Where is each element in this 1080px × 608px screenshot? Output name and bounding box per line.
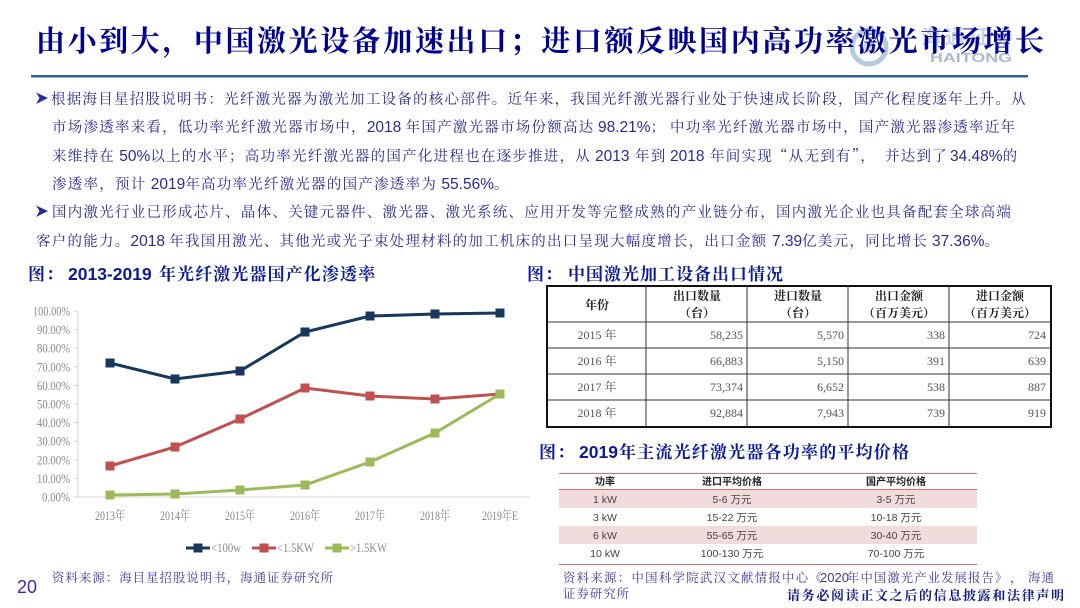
table rows: 92,884 bbox=[710, 406, 743, 420]
bullet 2: 亿美元，同比增长 bbox=[802, 234, 928, 250]
table: prices: 100-130 万元 bbox=[701, 548, 764, 560]
table rows: 2017 年 bbox=[577, 379, 617, 394]
bullet 2: 37.36% bbox=[932, 233, 985, 250]
legend bbox=[186, 540, 388, 555]
bullet 2: 2018 年我国用激光、其他光或光子束处理材料的加工机床的出口呈现大幅度增长，出口金额 bbox=[130, 233, 767, 250]
heading: export table: 图： bbox=[527, 265, 563, 284]
table rows: 73,374 bbox=[710, 380, 743, 394]
bullet 1: 34.48% bbox=[950, 148, 1003, 165]
table: prices: 15-22 万元 bbox=[707, 512, 758, 524]
y axis labels: 90.00% bbox=[37, 322, 70, 337]
source note: tables: ， bbox=[1010, 571, 1023, 585]
table rows: 2015 年 bbox=[577, 327, 617, 342]
heading: chart: 2013-2019 bbox=[68, 264, 152, 284]
series: <100w bbox=[106, 308, 504, 384]
bullet 2: 。 bbox=[985, 234, 1000, 250]
table header: （百万美元） bbox=[863, 305, 935, 320]
table: prices: 10 kW bbox=[590, 548, 620, 560]
table rows: 538 bbox=[927, 380, 945, 394]
bullet 2: 客户的能力。 bbox=[36, 233, 130, 250]
table rows: 739 bbox=[927, 406, 945, 420]
bullet 1: 渗透率，预计 2019年高功率光纤激光器的国产渗透率为 55.56%。 bbox=[52, 175, 510, 193]
table header bbox=[585, 288, 1036, 320]
legend: <100w bbox=[211, 540, 241, 555]
bullet 2 bbox=[36, 203, 1012, 250]
source note: tables bbox=[563, 570, 1055, 601]
x axis labels: 2014年 bbox=[160, 508, 190, 523]
y axis labels: 40.00% bbox=[37, 415, 70, 430]
bullet 1: 98.21% bbox=[598, 119, 651, 136]
table rows: 724 bbox=[1028, 328, 1046, 342]
y axis labels: 10.00% bbox=[37, 471, 70, 486]
table rows: 6,652 bbox=[817, 380, 844, 394]
table rows: 887 bbox=[1028, 380, 1046, 394]
table: prices: 国产平均价格 bbox=[866, 475, 926, 488]
source note: chart: 资料来源：海目星招股说明书，海通证券研究所 bbox=[52, 570, 334, 585]
y axis labels: 100.00% bbox=[33, 304, 70, 318]
disclaimer: 请务必阅读正文之后的信息披露和法律声明 bbox=[787, 588, 1064, 603]
bullet 1: 2018 bbox=[670, 148, 704, 165]
bullet 1: 来维持在 bbox=[52, 148, 115, 165]
table rows: 919 bbox=[1028, 406, 1046, 420]
table rows: 391 bbox=[927, 354, 945, 368]
title rule bbox=[31, 75, 1028, 78]
heading: price table: 图： bbox=[539, 443, 575, 462]
source note: tables: 年中国激光产业发展报告》 bbox=[847, 570, 1008, 585]
bullet 1: 的 bbox=[1003, 149, 1018, 165]
bullet 2: 国内激光行业已形成芯片、晶体、关键元器件、激光器、激光系统、应用开发等完整成熟的产业链分布，国内激光企业也具备配套全球高端 bbox=[52, 203, 1012, 221]
logo: Haitong watermark: 海通证券 bbox=[921, 26, 1013, 49]
table: exports bbox=[547, 286, 1051, 427]
y axis labels: 80.00% bbox=[37, 341, 70, 356]
table: prices: 进口平均价格 bbox=[702, 475, 762, 488]
bullet 1 bbox=[36, 90, 1027, 193]
table: prices: 6 kW bbox=[593, 530, 617, 542]
table header: （百万美元） bbox=[964, 305, 1036, 320]
source note: tables: 证券研究所 bbox=[563, 586, 630, 601]
bullet 1: 2018 年国产激光器市场份额高达 bbox=[367, 119, 594, 136]
table rows: 338 bbox=[927, 328, 945, 342]
table header: 出口数量 bbox=[673, 288, 721, 303]
x axis labels: 2013年 bbox=[95, 508, 125, 523]
table: prices: 1 kW bbox=[593, 494, 617, 506]
bullet 1: 年间实现 bbox=[710, 147, 773, 165]
y axis labels: 70.00% bbox=[37, 359, 70, 374]
bullet 2: 7.39 bbox=[772, 233, 802, 250]
logo: Haitong watermark: HAITONG bbox=[930, 51, 1012, 65]
table rows: 2018 年 bbox=[577, 405, 617, 420]
bullet 1: 根据海目星招股说明书：光纤激光器为激光加工设备的核心部件。近年来，我国光纤激光器行业处于快速成长阶段，国产化程度逐年上升。从 bbox=[51, 90, 1027, 108]
y axis labels: 0.00% bbox=[42, 490, 70, 504]
logo: Haitong watermark bbox=[852, 26, 1013, 65]
heading: chart: 图： bbox=[28, 265, 64, 284]
bullet 1: ； bbox=[651, 120, 666, 136]
table rows: 58,235 bbox=[710, 328, 743, 342]
heading: price table: 年主流光纤激光器各功率的平均价格 bbox=[619, 442, 910, 462]
text block: bullet points bbox=[36, 90, 1027, 250]
line chart bbox=[33, 304, 530, 555]
y axis labels: 50.00% bbox=[37, 396, 70, 412]
series: <1.5KW bbox=[106, 384, 504, 470]
bullet 1: 年到 bbox=[635, 147, 666, 165]
y axis labels: 30.00% bbox=[37, 434, 70, 449]
table header: （台） bbox=[679, 305, 715, 320]
legend: >1.5KW bbox=[350, 540, 388, 555]
table header: 进口数量 bbox=[774, 288, 822, 303]
x axis labels: 2019年E bbox=[482, 508, 518, 523]
bullet 1: 中功率光纤激光器市场中，国产激光器渗透率近年 bbox=[670, 118, 1016, 136]
table rows: 66,883 bbox=[710, 354, 743, 368]
heading: price table: 2019 bbox=[579, 442, 618, 462]
x axis labels: 2015年 bbox=[225, 508, 255, 523]
table header: （台） bbox=[780, 305, 816, 320]
x axis labels: 2017年 bbox=[355, 508, 385, 523]
bullet 1: 2013 bbox=[595, 148, 629, 165]
bullet 1: 市场渗透率来看，低功率光纤激光器市场中， bbox=[52, 119, 367, 136]
source note: tables: 海通 bbox=[1028, 571, 1055, 585]
table: prices: 10-18 万元 bbox=[871, 512, 922, 524]
source note: tables: 2020 bbox=[820, 570, 849, 585]
table: prices: 70-100 万元 bbox=[868, 548, 925, 560]
bullet 1: 并达到了 bbox=[885, 148, 948, 165]
table header: 年份 bbox=[585, 297, 609, 312]
legend: <1.5KW bbox=[277, 540, 315, 555]
table rows bbox=[577, 327, 1046, 420]
table rows: 5,150 bbox=[817, 354, 844, 368]
x axis labels bbox=[95, 508, 518, 523]
table header: 进口金额 bbox=[976, 288, 1025, 303]
bullet 1: 50%以上的水平；高功率光纤激光器的国产化进程也在逐步推进，从 bbox=[119, 148, 591, 165]
table: prices: 5-6 万元 bbox=[712, 494, 752, 506]
bullet 1: “从无到有”， bbox=[773, 145, 876, 166]
table rows: 5,570 bbox=[817, 328, 844, 342]
x axis labels: 2016年 bbox=[290, 508, 320, 523]
table: prices: 55-65 万元 bbox=[707, 530, 758, 542]
table: prices: 3-5 万元 bbox=[876, 494, 916, 506]
table: prices bbox=[559, 474, 977, 564]
table header: 出口金额 bbox=[875, 288, 924, 303]
heading: chart: 年光纤激光器国产化渗透率 bbox=[159, 264, 376, 284]
y axis labels bbox=[33, 304, 70, 504]
table: prices: 3 kW bbox=[593, 512, 617, 524]
heading: export table: 中国激光加工设备出口情况 bbox=[568, 264, 784, 284]
series: >1.5KW bbox=[106, 390, 504, 500]
table rows: 639 bbox=[1028, 354, 1046, 368]
source note: tables: 资料来源：中国科学院武汉文献情报中心《 bbox=[563, 570, 823, 585]
table rows: 7,943 bbox=[817, 406, 844, 420]
table rows: 2016 年 bbox=[577, 353, 617, 368]
y axis labels: 60.00% bbox=[37, 378, 70, 393]
table: prices: 功率 bbox=[595, 475, 615, 488]
title: 由小到大，中国激光设备加速出口；进口额反映国内高功率激光市场增长 bbox=[36, 25, 1044, 58]
page number: 20 bbox=[17, 577, 37, 597]
table: prices: 30-40 万元 bbox=[871, 530, 922, 542]
x axis labels: 2018年 bbox=[420, 508, 450, 523]
y axis labels: 20.00% bbox=[37, 452, 70, 467]
